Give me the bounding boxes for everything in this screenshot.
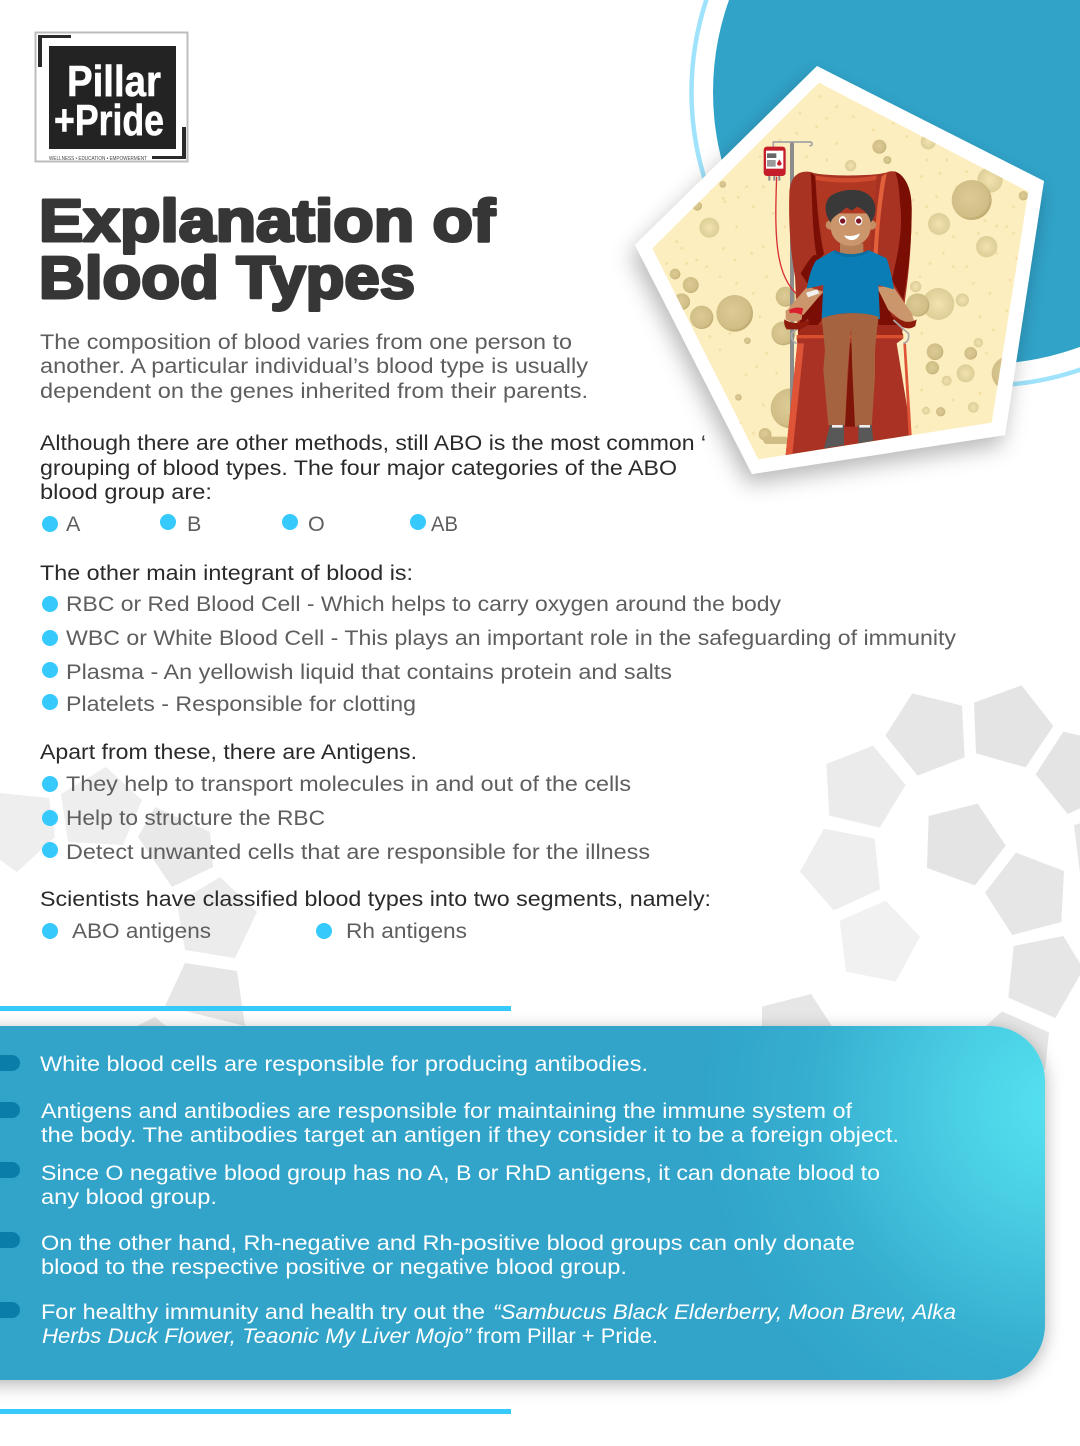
background pentagon pattern right bbox=[762, 685, 1080, 1070]
blood integrants list: WBC or White Blood Cell - This plays an important role in the safeguarding of immunity bbox=[66, 626, 956, 650]
blood integrants list bbox=[42, 592, 956, 716]
blood bag and tube bbox=[764, 147, 807, 302]
fact: O negative: Since O negative blood group has no A, B or RhD antigens, it can donate blood to bbox=[41, 1161, 880, 1185]
ABO paragraph: grouping of blood types. The four major categories of the ABO bbox=[40, 456, 677, 480]
logo: Pillar bbox=[67, 57, 161, 106]
title: Explanation of bbox=[39, 188, 495, 254]
top cyan rule bbox=[0, 1006, 511, 1011]
boy figure bbox=[784, 190, 917, 448]
antigens list: Help to structure the RBC bbox=[66, 806, 325, 830]
logo: +Pride bbox=[54, 96, 164, 145]
pentagon photo frame with illustration bbox=[635, 66, 1044, 474]
fact: Rh groups bbox=[41, 1231, 855, 1279]
ABO blood group list: AB bbox=[431, 512, 458, 536]
antigens list bbox=[42, 772, 650, 864]
IV pole bbox=[773, 142, 812, 448]
antigens list: Detect unwanted cells that are responsible for the illness bbox=[66, 840, 650, 864]
antigen segments list bbox=[42, 919, 467, 943]
ABO blood group list bbox=[42, 512, 458, 536]
illustration: blood donor in chair bbox=[652, 83, 1028, 459]
intro paragraph: The composition of blood varies from one person to bbox=[40, 330, 572, 354]
fact: O negative: any blood group. bbox=[41, 1185, 217, 1209]
fact: O negative bbox=[41, 1161, 880, 1209]
bottom cyan rule bbox=[0, 1409, 511, 1414]
ABO paragraph: blood group are: bbox=[40, 480, 212, 504]
classification heading: Scientists have classified blood types into two segments, namely: bbox=[40, 887, 711, 911]
blood integrants heading: The other main integrant of blood is: bbox=[40, 561, 413, 585]
fact: antibodies: White blood cells are responsible for producing antibodies. bbox=[40, 1052, 648, 1076]
logo bbox=[36, 32, 188, 162]
blood integrants list: RBC or Red Blood Cell - Which helps to carry oxygen around the body bbox=[66, 592, 781, 616]
title: Blood Types bbox=[39, 245, 415, 311]
antigens heading: Apart from these, there are Antigens. bbox=[40, 740, 417, 764]
intro paragraph: dependent on the genes inherited from their parents. bbox=[40, 379, 588, 403]
title bbox=[39, 188, 495, 311]
ABO blood group list: O bbox=[308, 512, 325, 536]
ABO paragraph: Although there are other methods, still ABO is the most common ‘ bbox=[40, 431, 706, 455]
fact: product recommendation: Herbs Duck Flower, Teaonic My Liver Mojo” bbox=[42, 1324, 472, 1348]
panel: key facts bbox=[0, 1026, 1045, 1380]
fact: Rh groups: On the other hand, Rh-negative and Rh-positive blood groups can only donate bbox=[41, 1231, 855, 1255]
fact: product recommendation: For healthy immunity and health try out the bbox=[41, 1300, 485, 1324]
intro paragraph bbox=[40, 330, 588, 403]
fact: immune system: Antigens and antibodies are responsible for maintaining the immune system of bbox=[41, 1099, 852, 1123]
antigen segments list: Rh antigens bbox=[346, 919, 467, 943]
blood integrants list: Platelets - Responsible for clotting bbox=[66, 692, 416, 716]
fact: product recommendation: from Pillar + Pride. bbox=[477, 1324, 658, 1348]
fact: product recommendation bbox=[41, 1300, 956, 1348]
decorative blue circle with ring bbox=[692, 0, 1080, 386]
ABO blood group list: B bbox=[187, 512, 201, 536]
ABO blood group list: A bbox=[66, 512, 81, 536]
fact: product recommendation: “Sambucus Black Elderberry, Moon Brew, Alka bbox=[493, 1300, 956, 1324]
fact: immune system: the body. The antibodies target an antigen if they consider it to be a foreign object. bbox=[41, 1123, 899, 1147]
antigen segments list: ABO antigens bbox=[72, 919, 211, 943]
fact: immune system bbox=[41, 1099, 899, 1147]
fact: Rh groups: blood to the respective positive or negative blood group. bbox=[41, 1255, 627, 1279]
antigens list: They help to transport molecules in and out of the cells bbox=[66, 772, 631, 796]
logo: WELLNESS • EDUCATION • EMPOWERMENT bbox=[49, 156, 148, 162]
blood integrants list: Plasma - An yellowish liquid that contains protein and salts bbox=[66, 660, 672, 684]
ABO paragraph bbox=[40, 431, 706, 504]
chair bbox=[786, 171, 912, 455]
background pentagon pattern left bbox=[0, 767, 257, 1026]
intro paragraph: another. A particular individual’s blood type is usually bbox=[40, 354, 588, 378]
fact bullets bbox=[0, 1055, 20, 1318]
